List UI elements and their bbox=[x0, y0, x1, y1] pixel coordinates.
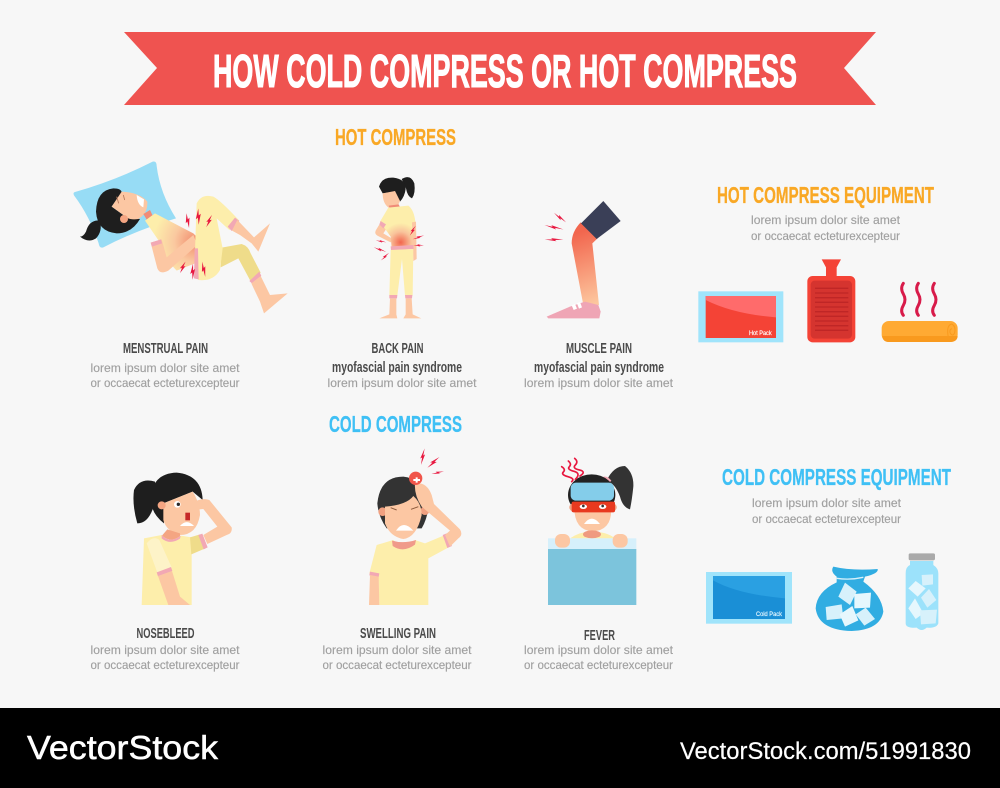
label: nosebleed bbox=[90, 626, 240, 672]
label: muscle pain: MUSCLE PAIN bbox=[566, 341, 632, 357]
label: back pain: BACK PAIN bbox=[372, 341, 424, 357]
illustration: swelling pain bbox=[369, 448, 461, 605]
heading: cold compress equipment: lorem ipsum dolor site amet bbox=[752, 496, 902, 510]
label: fever: FEVER bbox=[584, 628, 615, 644]
illustration: back pain bbox=[373, 177, 424, 318]
illustration: menstrual pain bbox=[74, 162, 288, 313]
label: muscle pain: lorem ipsum dolor site amet bbox=[524, 376, 674, 390]
icon: ice bag bbox=[816, 567, 883, 631]
heading: cold compress equipment: or occaecat ecteturexcepteur bbox=[752, 512, 901, 526]
label: back pain: myofascial pain syndrome bbox=[332, 360, 462, 376]
label: fever: or occaecat ecteturexcepteur bbox=[524, 658, 673, 672]
heading: cold compress: COLD COMPRESS bbox=[329, 411, 462, 437]
label: menstrual pain: or occaecat ecteturexcepteur bbox=[90, 376, 240, 390]
label: menstrual pain: lorem ipsum dolor site amet bbox=[90, 361, 240, 375]
label: menstrual pain bbox=[90, 341, 240, 390]
label: muscle pain bbox=[524, 341, 674, 390]
illustration: muscle pain bbox=[544, 201, 621, 318]
icon: ice jar bbox=[906, 553, 938, 630]
icon: hot towel bbox=[882, 283, 958, 342]
label: back pain: lorem ipsum dolor site amet bbox=[328, 376, 477, 390]
label: nosebleed: NOSEBLEED bbox=[136, 626, 194, 642]
label: swelling pain: or occaecat ecteturexcepteur bbox=[322, 658, 472, 672]
label: muscle pain: myofascial pain syndrome bbox=[534, 360, 664, 376]
heading: hot compress equipment: lorem ipsum dolor site amet bbox=[751, 213, 901, 227]
title banner bbox=[124, 32, 876, 105]
label: back pain bbox=[328, 341, 477, 390]
icon: cold pack: Cold Pack bbox=[756, 611, 783, 618]
label: nosebleed: or occaecat ecteturexcepteur bbox=[90, 658, 240, 672]
heading: hot compress equipment: or occaecat ecteturexcepteur bbox=[751, 229, 900, 243]
label: fever: lorem ipsum dolor site amet bbox=[524, 643, 674, 657]
footer bar: VectorStock bbox=[27, 729, 219, 766]
footer bar: VectorStock.com/51991830 bbox=[680, 738, 971, 765]
icon: hot pack bbox=[698, 291, 783, 342]
icon: hot pack: Hot Pack bbox=[749, 330, 772, 337]
illustration: fever bbox=[548, 458, 636, 605]
label: fever bbox=[524, 628, 674, 672]
label: swelling pain: lorem ipsum dolor site amet bbox=[322, 643, 472, 657]
label: nosebleed: lorem ipsum dolor site amet bbox=[90, 643, 240, 657]
icon: cold pack bbox=[706, 572, 792, 624]
icon: hot water bottle bbox=[807, 259, 855, 342]
illustration: hot compress equipment bbox=[698, 259, 958, 342]
heading: hot compress: HOT COMPRESS bbox=[335, 124, 456, 150]
heading: hot compress equipment bbox=[717, 182, 934, 243]
footer bar bbox=[0, 708, 1000, 788]
illustration: cold compress equipment bbox=[706, 553, 938, 631]
label: swelling pain bbox=[322, 626, 472, 672]
illustration: nosebleed bbox=[133, 473, 232, 605]
label: swelling pain: SWELLING PAIN bbox=[360, 626, 436, 642]
label: menstrual pain: MENSTRUAL PAIN bbox=[123, 341, 208, 357]
heading: cold compress equipment bbox=[722, 464, 951, 526]
